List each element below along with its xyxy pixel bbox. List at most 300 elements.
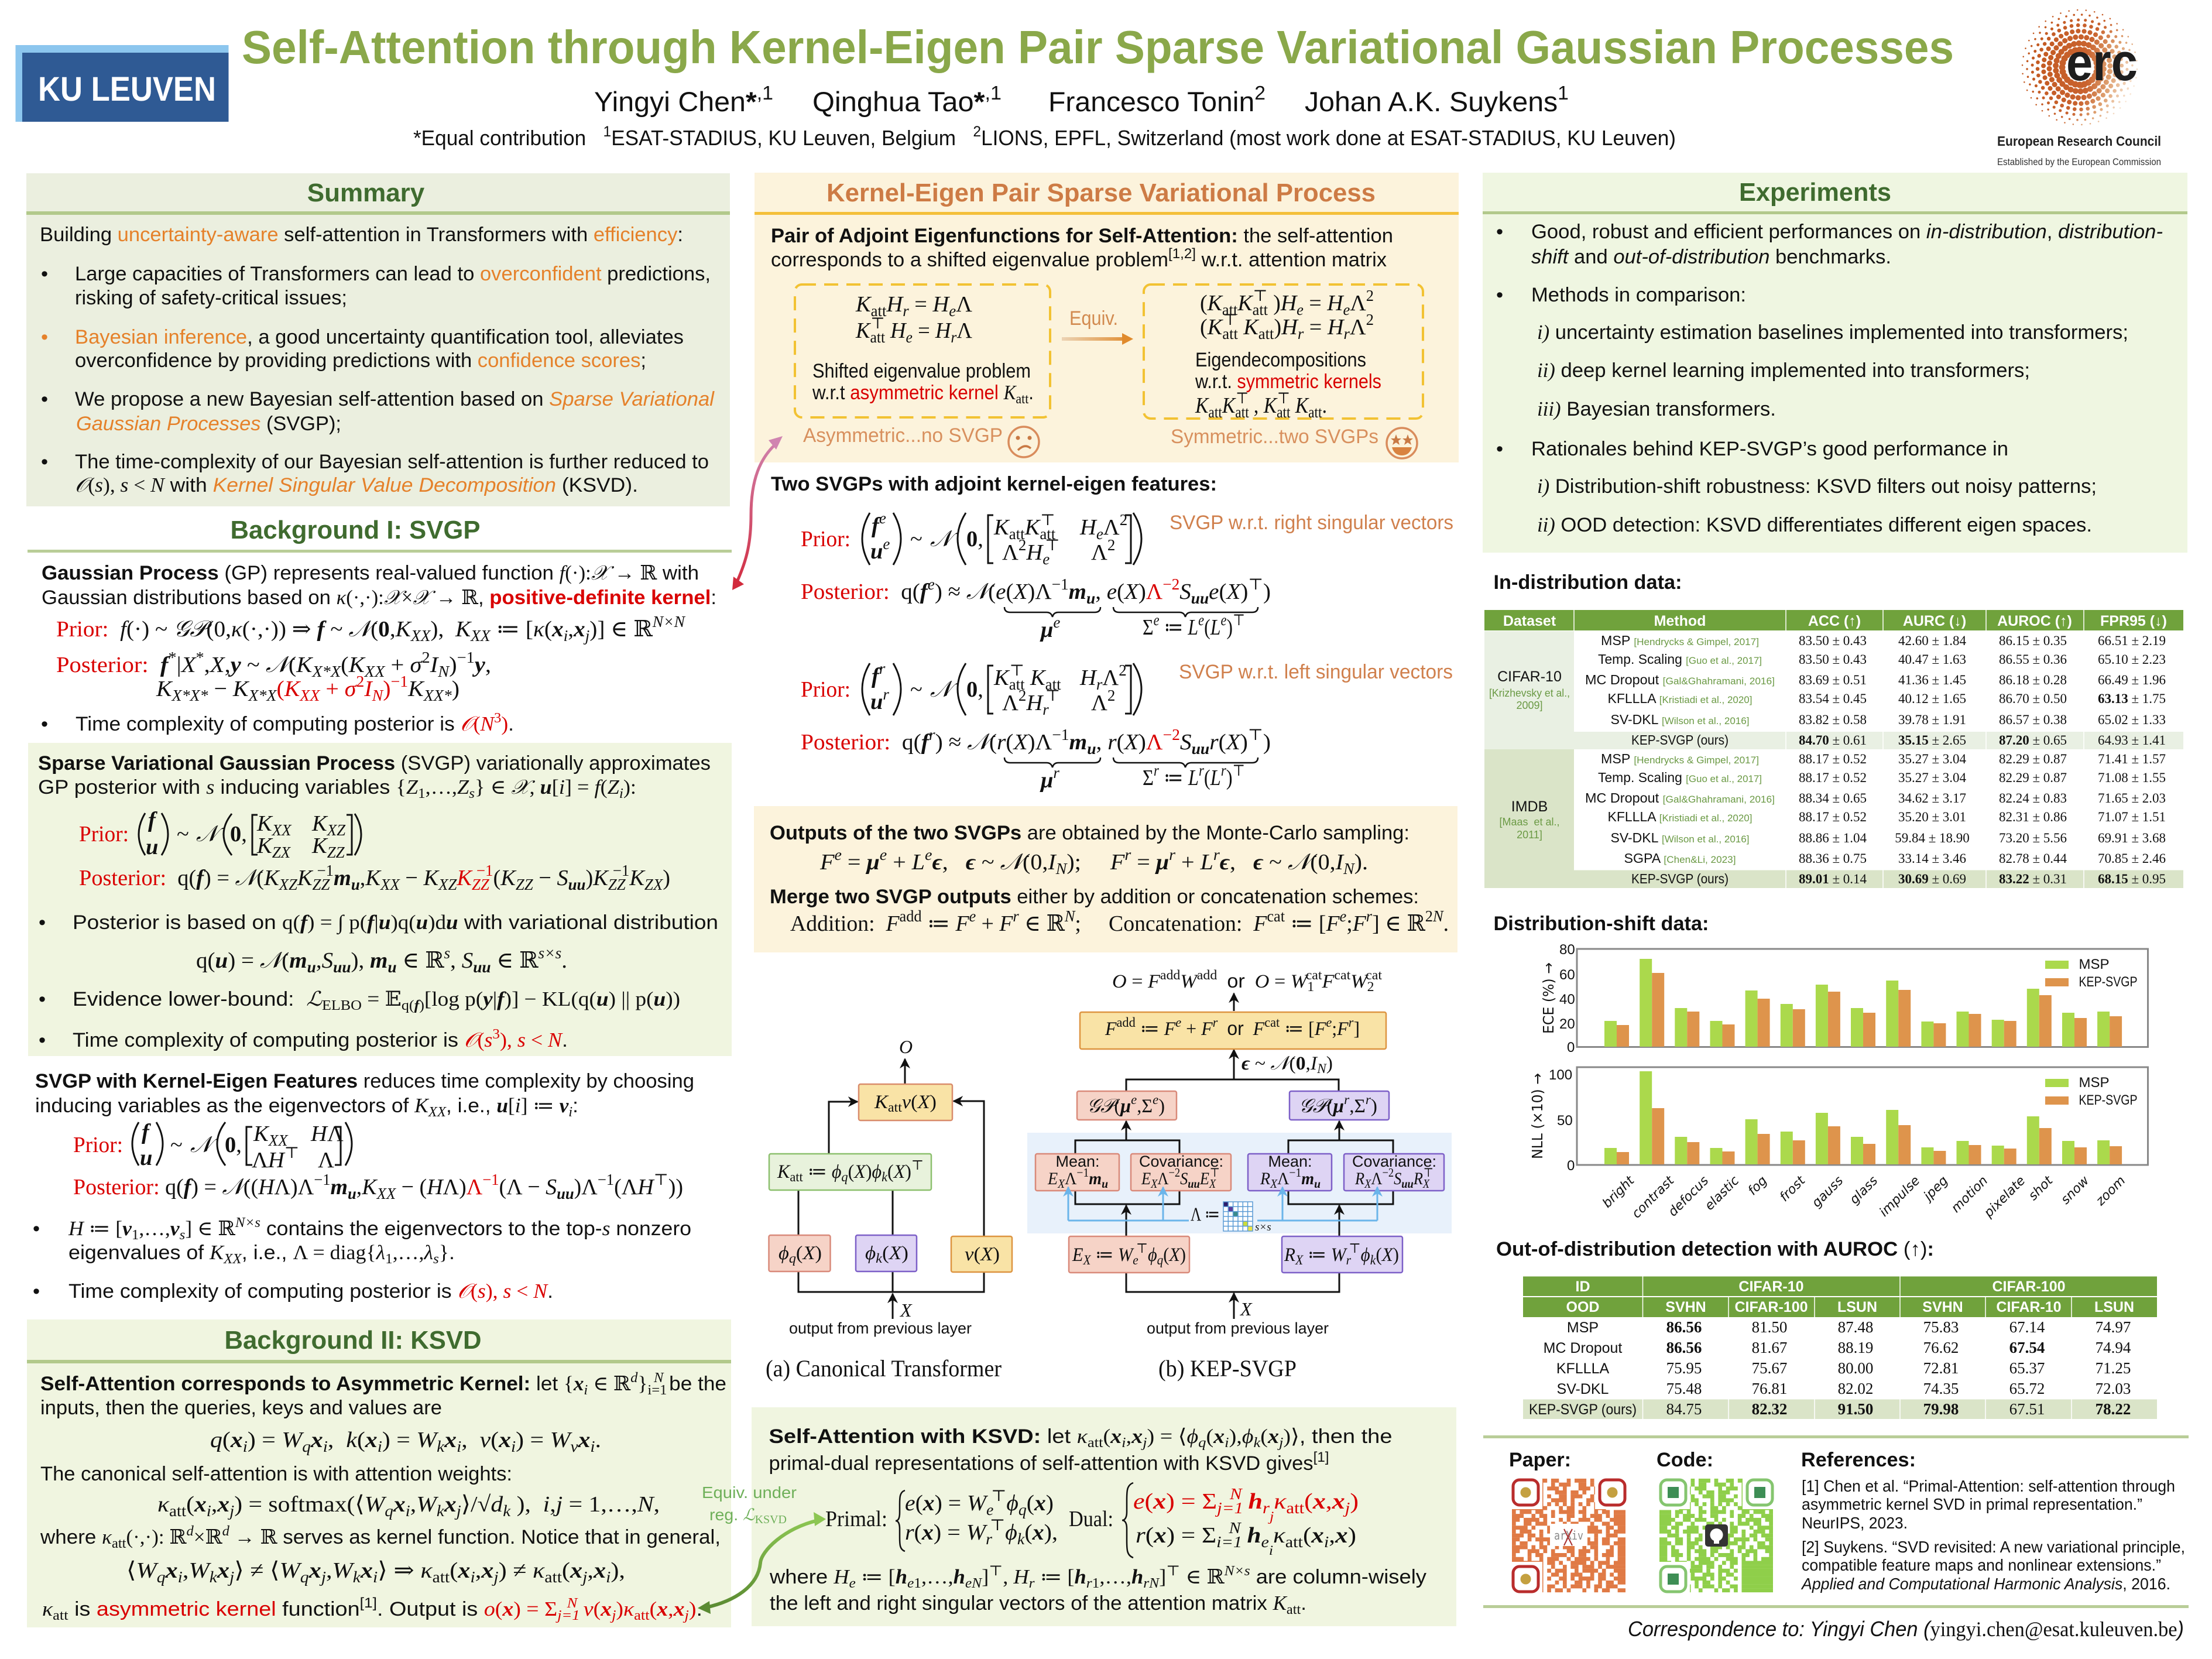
metric values [1799, 633, 2166, 886]
OOD values: 91.50 [1838, 1400, 1873, 1418]
input label: output from previous layer [1147, 1319, 1329, 1337]
x axis labels [1600, 1173, 2128, 1221]
input label [1147, 1298, 1329, 1337]
summary text: Bayesian inference, a good uncertainty quantification tool, alleviates [75, 326, 684, 348]
OOD values: 65.72 [2009, 1380, 2045, 1397]
ECE y axis: 20 [1559, 1016, 1575, 1032]
authors: Johan A.K. Suykens 1 [1305, 82, 1569, 117]
note: right singular vectors: SVGP w.r.t. right singular vectors [1170, 512, 1453, 534]
gaussian process text: Posterior: f*|X*,X,y ~ 𝒩(KX*X(KXX + σ2IN)−1y, [56, 649, 491, 680]
method names: MSP [Hendrycks & Gimpel, 2017] [1601, 751, 1759, 766]
experiments bullets: iii) Bayesian transformers. [1537, 398, 1776, 420]
adjoint eigenfunctions text: corresponds to a shifted eigenvalue problem[1,2] w.r.t. attention matrix [771, 246, 1387, 271]
box: GP e [1077, 1091, 1177, 1120]
table: in-distribution results [1484, 610, 2183, 888]
block: code QR [1656, 1449, 1777, 1596]
block: code QR: Code: [1657, 1449, 1713, 1471]
box: eigendecompositions: Eigendecompositions [1195, 349, 1366, 371]
equation: primal: Primal: [825, 1507, 887, 1531]
NLL legend [2045, 1075, 2138, 1108]
equation: SVGP prior: ~ [177, 822, 189, 846]
block: paper QR: Paper: [1509, 1449, 1571, 1471]
metric values: 42.60 ± 1.84 [1898, 633, 1967, 648]
summary text: • [41, 263, 48, 285]
x axis labels: contrast [1629, 1173, 1678, 1221]
equation: SVGP prior: Prior: [79, 822, 129, 846]
subheading: distribution-shift data: Distribution-shift data: [1494, 913, 1709, 935]
x axis labels: defocus [1666, 1174, 1712, 1219]
equation: SVGP prior: KZZ [311, 834, 345, 861]
table header: Method [1654, 613, 1706, 629]
NLL y axis [1529, 1067, 1575, 1174]
metric values: 66.49 ± 1.96 [2098, 673, 2166, 687]
equation: dual: r(x) = Σ i=1N heiκatt(xi,x) [1136, 1519, 1356, 1558]
box: covariance r [1344, 1153, 1444, 1191]
box: phi k: ϕk(X) [865, 1243, 908, 1266]
box: covariance e: EXΛ−2SuuEX⊤ [1141, 1166, 1220, 1191]
panel: self-attention with KSVD: where He ≔ [he1,…,heN]⊤, Hr ≔ [hr1,…,hrN]⊤ ∈ ℝN×s are column-wisely [769, 1563, 1427, 1591]
box: eigendecompositions: KattKatt⊤, Katt⊤Katt. [1195, 389, 1327, 421]
OOD values: 65.37 [2009, 1359, 2045, 1377]
OOD table header: ID [1576, 1278, 1590, 1295]
heading: summary: Summary [307, 179, 425, 207]
summary text: • [41, 388, 48, 410]
panel: experiments [1483, 173, 2187, 553]
arrow: equivalent: Equiv. [1069, 307, 1118, 330]
metric values: 40.12 ± 1.65 [1898, 691, 1966, 706]
panel: outputs of the two SVGPs: Addition: Fadd ≔ Fe + Fr ∈ ℝN; Concatenation: Fcat ≔ [Fe;Fr] ∈ ℝ2N. [790, 907, 1449, 936]
OOD method names: KFLLLA [1556, 1360, 1609, 1377]
equation: KEF prior: Prior: [73, 1133, 123, 1157]
equation: KEF posterior: Posterior: q(f) = 𝒩((HΛ)Λ−1mu,KXX − (HΛ)Λ−1(Λ − Suu)Λ−1(ΛH⊤)) [73, 1171, 683, 1202]
block: SVGP with kernel-eigen features: SVGP with Kernel-Eigen Features reduces time complexity by choosing [35, 1070, 694, 1092]
table header: AUROC (↑) [1997, 613, 2072, 629]
experiments bullets [1496, 221, 2163, 536]
equation: dual: Dual: [1069, 1507, 1113, 1531]
bar chart: NLL [1529, 1067, 2148, 1221]
equation: prior r: ~ [910, 677, 922, 702]
method names: SGPA [Chen&Li, 2023] [1624, 851, 1736, 866]
ECE y axis: ECE (%) → [1540, 962, 1557, 1034]
OOD table header [1566, 1278, 2134, 1315]
method names: MC Dropout [Gal&Ghahramani, 2016] [1585, 672, 1775, 687]
NLL y axis: NLL (×10) → [1529, 1073, 1546, 1159]
equation: posterior e: Σe ≔ Le(Le)⊤ [1143, 611, 1245, 640]
OOD table header: SVHN [1922, 1299, 1963, 1315]
equation: prior r: 0, [966, 677, 983, 702]
OOD values: 71.25 [2096, 1359, 2131, 1377]
OOD method names: KEP-SVGP (ours) [1529, 1401, 1637, 1418]
metric values: 35.27 ± 3.04 [1898, 770, 1967, 785]
heading: KEP-SVP: Kernel-Eigen Pair Sparse Variational Process [827, 179, 1376, 207]
box: attention kernel: Katt ≔ ϕq(X)ϕk(X)⊤ [777, 1157, 924, 1184]
metric values: 70.85 ± 2.46 [2098, 851, 2166, 866]
panel: sparse variational GP: Time complexity of computing posterior is 𝒪(s3), s < N. [73, 1026, 568, 1051]
OOD values: 84.75 [1666, 1400, 1702, 1418]
diagram: canonical transformer [766, 1036, 1012, 1382]
box: shifted eigenvalue problem: KattHr = HeΛ [855, 292, 972, 320]
box: shifted eigenvalue problem: Shifted eigenvalue problem [812, 360, 1031, 382]
panel: outputs of the two SVGPs [754, 806, 1457, 952]
method names: KFLLLA [Kristiadi et al., 2020] [1607, 809, 1753, 824]
metric values: 71.41 ± 1.57 [2098, 752, 2166, 766]
box: GP r: 𝒢𝒫(μr,Σr) [1299, 1092, 1377, 1117]
metric values: 82.24 ± 0.83 [1999, 791, 2067, 805]
box: attention: Kattv(X) [874, 1092, 937, 1115]
equation: prior e: KattKatt⊤ [993, 511, 1056, 543]
method names: Temp. Scaling [Guo et al., 2017] [1598, 652, 1762, 667]
equation: prior r: Λ2 [1091, 687, 1115, 715]
equation: SVGP prior: f [148, 808, 158, 832]
block: references: References: [1801, 1449, 1916, 1471]
icon: QR code paper: arXiv [1554, 1528, 1583, 1543]
subheading: Two SVGPs with adjoint kernel-eigen features: [771, 473, 1217, 495]
KSVD text and equations: inputs, then the queries, keys and values are [40, 1397, 442, 1419]
equation: KEF prior: HΛ [310, 1122, 344, 1146]
experiments bullets: Methods in comparison: [1531, 284, 1746, 306]
x axis labels: frost [1777, 1173, 1809, 1205]
equation: SVGP prior: 0, [230, 822, 247, 846]
metric values: 83.69 ± 0.51 [1799, 673, 1867, 687]
OOD values: 75.67 [1752, 1359, 1787, 1377]
table header: FPR95 (↓) [2100, 613, 2167, 629]
box: mean r: RXΛ−1mu [1260, 1166, 1321, 1191]
output formula: O = FaddWadd or O = W1catFcatW2cat [1112, 967, 1383, 994]
OOD values: 74.35 [1923, 1380, 1959, 1397]
OOD values: 72.03 [2096, 1380, 2131, 1397]
equation: posterior e: μe [1040, 613, 1060, 642]
ECE legend [2045, 957, 2138, 990]
panel: sparse variational GP: q(u) = 𝒩(mu,Suu), mu ∈ ℝs, Suu ∈ ℝs×s. [196, 944, 567, 976]
NLL y axis: 0 [1567, 1158, 1575, 1174]
block: paper QR [1508, 1449, 1629, 1596]
equation: primal [825, 1487, 1058, 1551]
metric values: 35.20 ± 3.01 [1898, 810, 1966, 824]
OOD method names: MSP [1567, 1319, 1599, 1336]
input label [789, 1300, 972, 1337]
box: mean e: Mean: [1055, 1153, 1100, 1170]
OOD values: 86.56 [1666, 1318, 1702, 1336]
panel: self-attention with KSVD: the left and right singular vectors of the attention matrix Katt. [770, 1592, 1306, 1617]
method names: Temp. Scaling [Guo et al., 2017] [1598, 770, 1762, 785]
authors: Yingyi Chen*,1 [594, 82, 773, 117]
logo: European Research Council [1997, 0, 2161, 167]
gaussian process text: • [41, 713, 48, 735]
x axis labels: zoom [2093, 1174, 2128, 1209]
correspondence: Correspondence to: Yingyi Chen (yingyi.chen@esat.kuleuven.be) [1628, 1617, 2184, 1641]
OOD table header: CIFAR-100 [1992, 1278, 2066, 1295]
equation: prior e: 𝒩 [930, 527, 958, 551]
equation: primal: r(x) = Wr⊤ϕk(x), [905, 1516, 1058, 1548]
metric values: 83.50 ± 0.43 [1799, 633, 1867, 648]
summary text: • [41, 451, 48, 473]
equation: primal: e(x) = We⊤ϕq(x) [905, 1487, 1054, 1519]
subheading: OOD detection: Out-of-distribution detection with AUROC (↑): [1496, 1238, 1934, 1260]
KSVD text and equations: κatt is asymmetric kernel function [1]. Output is o(x) = Σ j=1N v(xj)κatt(x,xj). [42, 1595, 702, 1623]
OOD values: 86.56 [1666, 1339, 1702, 1356]
diagram: KEP-SVGP [1027, 967, 1452, 1382]
gaussian process text: Gaussian distributions based on κ(·,·):𝒳×𝒳 → ℝ, positive-definite kernel: [42, 587, 716, 609]
equation: posterior r [801, 726, 1271, 793]
box: GP e: 𝒢𝒫(μe,Σe) [1087, 1092, 1165, 1117]
metric values: 87.20 ± 0.65 [1999, 733, 2067, 748]
OOD values: 81.67 [1752, 1339, 1787, 1356]
icon: QR code paper [1508, 1475, 1629, 1596]
blue connectors [1068, 1187, 1377, 1221]
method names: SV-DKL [Wilson et al., 2016] [1611, 712, 1749, 727]
metric values: 83.82 ± 0.58 [1799, 712, 1867, 727]
OOD method names [1529, 1319, 1637, 1418]
bar chart: ECE [1540, 942, 2148, 1055]
equation: SVGP prior: KXX [256, 811, 292, 839]
method names: KEP-SVGP (ours) [1631, 732, 1729, 748]
metric values: 89.01 ± 0.14 [1799, 872, 1867, 886]
box: shifted eigenvalue problem: w.r.t asymmetric kernel Katt. [812, 382, 1034, 407]
box: shifted eigenvalue problem: Katt⊤He = HrΛ [855, 314, 972, 346]
metric values: 84.70 ± 0.61 [1799, 733, 1867, 748]
icon: QR code GitHub [1656, 1475, 1777, 1596]
panel: sparse variational GP: Evidence lower-bound: ℒELBO = 𝔼q(f)[log p(y|f)] − KL(q( u) || p(u)) [73, 988, 680, 1013]
dataset labels: 2009] [1516, 700, 1543, 711]
caption: symmetric two SVGPs: Symmetric...two SVGPs [1171, 426, 1378, 448]
metric values: 39.78 ± 1.91 [1898, 712, 1966, 727]
box: covariance e [1131, 1153, 1231, 1191]
box: eigendecompositions: w.r.t. symmetric kernels [1195, 371, 1381, 393]
output label O: O [899, 1036, 913, 1057]
panel: kernel-eigen pair sparse variational process [755, 173, 1459, 462]
OOD values: 82.32 [1752, 1400, 1787, 1418]
box: mean e [1035, 1153, 1119, 1191]
metric values: 71.07 ± 1.51 [2098, 810, 2166, 824]
dataset labels: [Maas et al., [1499, 816, 1560, 828]
metric values: 88.86 ± 1.04 [1799, 831, 1867, 845]
metric values: 64.93 ± 1.41 [2098, 733, 2166, 748]
OOD values: 78.22 [2096, 1400, 2131, 1418]
box: R_X: RX ≔ Wr⊤ϕk(X) [1284, 1240, 1399, 1267]
summary text: risking of safety-critical issues; [75, 287, 347, 309]
box: covariance r: RXΛ−2SuuRX⊤ [1354, 1166, 1433, 1191]
metric values: 35.27 ± 3.04 [1898, 752, 1967, 766]
metric values: 40.47 ± 1.63 [1898, 652, 1966, 667]
OOD values: 75.95 [1666, 1359, 1702, 1377]
box: phi k [856, 1235, 917, 1271]
summary text: 𝒪(s), s < N with Kernel Singular Value Decomposition (KSVD). [75, 474, 638, 496]
equation: prior e: ~ [910, 527, 922, 551]
OOD values: 74.97 [2096, 1318, 2131, 1336]
summary text [40, 224, 715, 496]
x axis labels: snow [2058, 1173, 2093, 1207]
block: SVGP with kernel-eigen features: • [33, 1218, 40, 1240]
x axis labels: bright [1600, 1173, 1638, 1211]
box: E_X: EX ≔ We⊤ϕq(X) [1072, 1240, 1186, 1267]
ECE y axis: 40 [1559, 992, 1575, 1007]
equation: prior r: Katt⊤ Katt [993, 661, 1061, 693]
box: v [951, 1236, 1012, 1272]
input label: output from previous layer [789, 1319, 972, 1337]
equation: prior e: Prior: [801, 527, 850, 551]
gaussian process text: KX*X* − KX*X(KXX + σ2IN)−1KXX*) [156, 673, 459, 704]
equation: dual: e(x) = Σ j=1N hrjκatt(x,xj) [1133, 1485, 1359, 1524]
equation: SVGP prior: KZX [256, 834, 291, 861]
metric values: 41.36 ± 1.45 [1898, 673, 1966, 687]
box: v: v(X) [965, 1244, 1000, 1265]
NLL bars MSP [1604, 1071, 2110, 1164]
method names: SV-DKL [Wilson et al., 2016] [1611, 830, 1749, 845]
metric values: 83.50 ± 0.43 [1799, 652, 1867, 667]
panel: sparse variational GP: Posterior is based on q(f) = ∫ p(f|u)q(u)du with variational distribution [73, 911, 718, 935]
ECE legend: KEP-SVGP [2079, 974, 2138, 990]
OOD table header: OOD [1566, 1299, 1599, 1315]
lambda label: Λ ≔ [1191, 1204, 1220, 1225]
metric values: 30.69 ± 0.69 [1898, 872, 1966, 886]
icon: star-eyes face [1387, 428, 1417, 458]
metric values: 59.84 ± 18.90 [1895, 831, 1970, 845]
metric values: 86.57 ± 0.38 [1999, 712, 2067, 727]
metric values: 65.10 ± 2.23 [2098, 652, 2166, 667]
logo: European Research Council: Established by the European Commission [1997, 157, 2161, 167]
label: s by s: s×s [1255, 1221, 1271, 1233]
OOD values: 74.94 [2096, 1339, 2131, 1356]
connectors [798, 1059, 984, 1319]
box: covariance r: Covariance: [1352, 1153, 1436, 1170]
logo: KU Leuven [15, 45, 228, 122]
equation: prior r: Λ2Hr⊤ [1002, 687, 1060, 718]
arrow: equivalent under regularisation [698, 1483, 826, 1614]
adjoint eigenfunctions text [771, 225, 1393, 271]
equation: posterior r: Posterior: q(fr) ≈ 𝒩(r(X)Λ−1mu, r(X)Λ−2Suur(X)⊤) [801, 726, 1271, 757]
box: eigendecompositions: (KattKatt⊤)He = HeΛ2 [1200, 287, 1374, 318]
table header [1503, 613, 2167, 629]
metric values: 83.54 ± 0.45 [1799, 691, 1867, 706]
equation: SVGP posterior: Posterior: q(f) = 𝒩(KXZKZZ−1mu,KXX − KXZKZZ−1(KZZ − Suu)KZZ−1KZX) [79, 862, 670, 893]
logo: European Research Council: European Research Council [1997, 133, 2161, 149]
heading: background I: Background I: SVGP [231, 516, 480, 544]
metric values: 69.91 ± 3.68 [2098, 831, 2166, 845]
box: GP r [1290, 1091, 1389, 1120]
panel: sparse variational GP: • [39, 1029, 46, 1051]
metric values: 88.17 ± 0.52 [1799, 810, 1867, 824]
summary text: overconfidence by providing predictions with confidence scores; [75, 349, 646, 372]
authors [594, 82, 1569, 117]
metric values: 35.15 ± 2.65 [1898, 733, 1966, 748]
metric values: 66.51 ± 2.19 [2098, 633, 2166, 648]
panel: sparse variational GP: • [39, 988, 46, 1010]
metric values: 88.17 ± 0.52 [1799, 770, 1867, 785]
panel: self-attention with KSVD: primal-dual representations of self-attention with KSVD gives[1] [769, 1449, 1329, 1475]
OOD table header: CIFAR-10 [1738, 1278, 1804, 1295]
KSVD text and equations: Self-Attention corresponds to Asymmetric Kernel: let {xi ∈ ℝd}i=1N be the [40, 1370, 726, 1398]
dataset labels: 2011] [1517, 829, 1542, 841]
method names: KFLLLA [Kristiadi et al., 2020] [1607, 691, 1753, 706]
block: references [1801, 1449, 2185, 1593]
metric values: 86.18 ± 0.28 [1999, 673, 2067, 687]
experiments bullets: Rationales behind KEP-SVGP’s good performance in [1531, 438, 2008, 460]
metric values: 86.55 ± 0.36 [1999, 652, 2067, 667]
equation: SVGP prior: 𝒩 [196, 822, 224, 846]
OOD values: 72.81 [1923, 1359, 1959, 1377]
KSVD text and equations: κatt(xi,xj) = softmax(⟨ Wqxi,Wkxj⟩/√dk ), i,j = 1,…,N, [157, 1492, 660, 1520]
method names [1585, 633, 1775, 886]
heading: background II: Background II: KSVD [225, 1326, 481, 1355]
metric values: 82.31 ± 0.86 [1999, 810, 2067, 824]
experiments bullets: shift and out-of-distribution benchmarks. [1531, 246, 1891, 268]
metric values: 33.14 ± 3.46 [1898, 851, 1966, 866]
block: references: Applied and Computational Harmonic Analysis, 2016. [1801, 1575, 2170, 1593]
equation: prior e [801, 509, 1141, 568]
metric values: 86.70 ± 0.50 [1999, 691, 2067, 706]
experiments bullets: Good, robust and efficient performances on in-distribution, distribution- [1531, 221, 2163, 243]
equation: dual [1069, 1483, 1359, 1558]
experiments bullets: i) uncertainty estimation baselines implemented into transformers; [1537, 321, 2128, 344]
summary text: • [41, 326, 48, 348]
block: SVGP with kernel-eigen features: inducing variables as the eigenvectors of KXX, i.e., u[i] ≔ vi: [35, 1095, 578, 1120]
panel: sparse variational GP [28, 743, 732, 1056]
method names: KEP-SVGP (ours) [1631, 871, 1729, 886]
OOD method names: SV-DKL [1557, 1381, 1609, 1397]
summary text: The time-complexity of our Bayesian self-attention is further reduced to [75, 451, 709, 473]
OOD table header: SVHN [1665, 1299, 1706, 1315]
box: merged output [1080, 1012, 1386, 1049]
dataset labels: IMDB [1511, 798, 1548, 815]
dataset labels [1489, 669, 1570, 841]
authors: Francesco Tonin 2 [1048, 82, 1266, 117]
OOD values: 82.02 [1838, 1380, 1873, 1397]
x axis labels: motion [1949, 1174, 1991, 1216]
experiments bullets: ii) OOD detection: KSVD differentiates different eigen spaces. [1537, 514, 2092, 536]
box: attention [859, 1084, 952, 1120]
OOD values: 67.51 [2009, 1400, 2045, 1418]
box: eigendecompositions [1144, 285, 1423, 421]
logo: European Research Council: erc [2066, 33, 2138, 92]
caption b: (b) KEP-SVGP [1158, 1355, 1297, 1382]
equation: KEF prior [73, 1120, 352, 1173]
OOD values: 87.48 [1838, 1318, 1873, 1336]
experiments bullets: • [1496, 221, 1503, 243]
panel: sparse variational GP: Sparse Variational Gaussian Process (SVGP) variationally approximates [38, 752, 711, 774]
block: SVGP with kernel-eigen features: Time complexity of computing posterior is 𝒪(s), s < N. [68, 1280, 553, 1302]
equation: SVGP prior: KXZ [311, 811, 346, 839]
note: left singular vectors: SVGP w.r.t. left singular vectors [1179, 661, 1453, 683]
adjoint eigenfunctions text: Pair of Adjoint Eigenfunctions for Self-Attention: the self-attention [771, 225, 1393, 247]
equation: KEF prior: KXX [253, 1122, 289, 1149]
gaussian process text: Time complexity of computing posterior is 𝒪(N3). [76, 710, 514, 735]
metric values: 68.15 ± 0.95 [2098, 872, 2166, 886]
equation: prior e: 0, [966, 527, 983, 551]
OOD values: 67.54 [2009, 1339, 2045, 1356]
table header: Dataset [1503, 613, 1556, 629]
input label: X [899, 1300, 913, 1321]
block: references: NeurIPS, 2023. [1802, 1514, 1908, 1532]
box: attention kernel [769, 1154, 931, 1190]
KSVD text and equations: q(xi) = Wqxi, k(xi) = Wkxi, v(xi) = Wvxi. [210, 1428, 601, 1455]
caption a: (a) Canonical Transformer [766, 1355, 1002, 1382]
x axis labels: glass [1847, 1174, 1881, 1207]
equation: prior r: Prior: [801, 677, 850, 702]
summary text: We propose a new Bayesian self-attention based on Sparse Variational [75, 388, 715, 410]
experiments bullets: • [1496, 438, 1503, 460]
OOD values: 88.19 [1838, 1339, 1873, 1356]
metric values: 88.34 ± 0.65 [1799, 791, 1867, 805]
experiments bullets: ii) deep kernel learning implemented into transformers; [1537, 359, 2030, 382]
OOD values: 75.48 [1666, 1380, 1702, 1397]
method names: MC Dropout [Gal&Ghahramani, 2016] [1585, 790, 1775, 805]
metric values: 34.62 ± 3.17 [1898, 791, 1966, 805]
metric values: 65.02 ± 1.33 [2098, 712, 2166, 727]
NLL legend: MSP [2079, 1075, 2110, 1091]
equation: SVGP prior: u [146, 835, 158, 859]
metric values: 71.08 ± 1.55 [2098, 770, 2166, 785]
equation: prior r [801, 660, 1141, 718]
